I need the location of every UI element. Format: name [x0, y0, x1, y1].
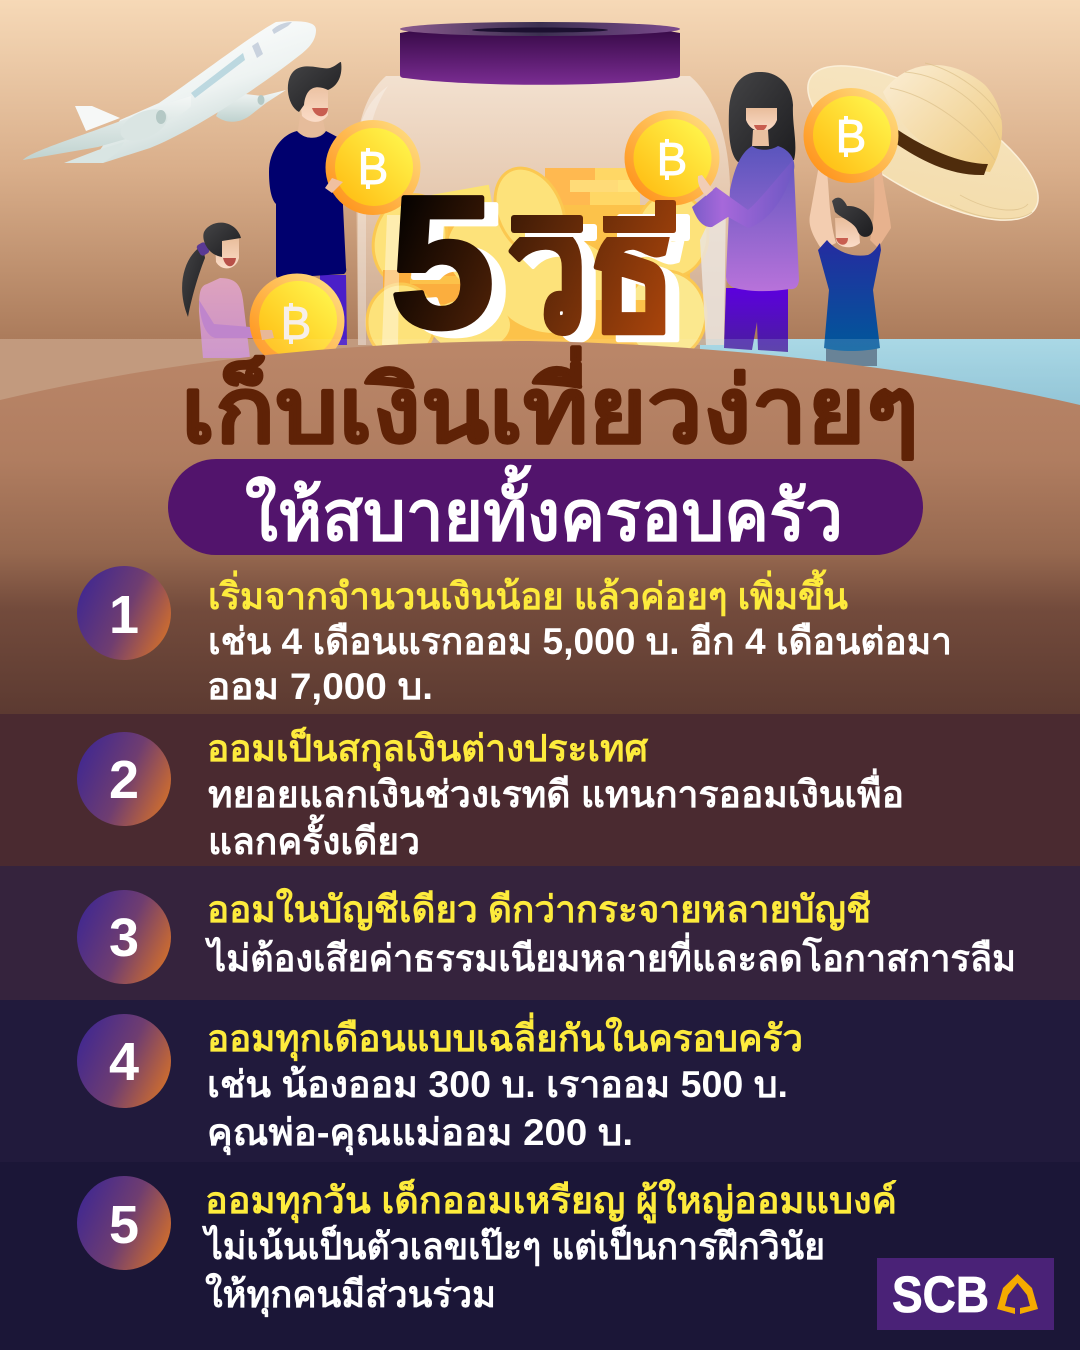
subtitle pill: ให้สบายทั้งครอบครัว	[245, 464, 843, 555]
tip 5 body: ให้ทุกคนมีส่วนร่วม	[205, 1272, 496, 1318]
tip 2 body: แลกครั้งเดียว	[208, 814, 420, 862]
headline: เก็บเงินเที่ยวง่ายๆ: เก็บเงินเที่ยวง่ายๆ	[181, 345, 919, 462]
jar lid	[400, 22, 680, 85]
number badge 4	[77, 1014, 171, 1108]
number badge 2: 2	[109, 750, 139, 810]
coin: B	[657, 133, 687, 185]
tip 4 body: คุณพ่อ-คุณแม่ออม 200 บ.	[207, 1112, 633, 1156]
number badge 5	[77, 1176, 171, 1270]
dark gradient 5 วิธี	[393, 195, 676, 336]
tip 4 heading: ออมทุกเดือนแบบเฉลี่ยกันในครอบครัว	[207, 1012, 803, 1062]
subtitle pill	[168, 459, 923, 555]
number badge 3: 3	[109, 908, 139, 968]
number badge 1: 1	[109, 585, 139, 645]
headline: 5 วิธี	[393, 195, 690, 342]
number badge 1	[77, 566, 171, 660]
tip 4	[77, 1012, 803, 1156]
dark gradient 5 วิธี: 5	[390, 157, 495, 367]
white offset of 5 วิธี: 5	[404, 164, 509, 374]
SCB logo	[877, 1258, 1054, 1330]
illustration: airplane	[23, 21, 316, 163]
tip 3 heading: ออมในบัญชีเดียว ดีกว่ากระจายหลายบัญชี	[207, 887, 871, 931]
coin	[804, 88, 898, 183]
jar coins	[363, 157, 708, 360]
coin: B	[358, 142, 388, 194]
row backgrounds	[0, 714, 1080, 1350]
sky background	[0, 0, 1080, 340]
number badge 4: 4	[109, 1032, 139, 1092]
tip 1 body: ออม 7,000 บ.	[207, 666, 433, 707]
tip 4 body: เช่น น้องออม 300 บ. เราออม 500 บ.	[207, 1064, 788, 1105]
tip 1 body	[207, 621, 952, 707]
illustration: mother with coin	[624, 72, 799, 352]
tip 2	[77, 725, 904, 862]
illustration: straw hat	[786, 36, 1060, 250]
tip 3 body: ไม่ต้องเสียค่าธรรมเนียมหลายที่และลดโอกาสการลืม	[204, 932, 1016, 979]
sand hill	[0, 341, 1080, 714]
sea strip	[0, 339, 1080, 429]
white offset of 5 วิธี	[411, 202, 690, 342]
tip 5	[77, 1176, 897, 1318]
tip 4 body	[207, 1064, 788, 1156]
illustration: coin jar	[356, 22, 730, 360]
tip 5 body	[201, 1223, 825, 1318]
tip 5 heading: ออมทุกวัน เด็กออมเหรียญ ผู้ใหญ่ออมแบงค์	[205, 1177, 897, 1224]
number badge 3	[77, 890, 171, 984]
coin: B	[281, 297, 311, 349]
illustration: father with coin	[269, 62, 420, 345]
white offset of 5 วิธี: วิธี	[519, 180, 691, 375]
number badge 2	[77, 732, 171, 826]
tip 2 heading: ออมเป็นสกุลเงินต่างประเทศ	[207, 725, 649, 772]
tip 2 body: ทยอยแลกเงินช่วงเรทดี แทนการออมเงินเพื่อ	[208, 768, 904, 815]
illustration: boy with coin	[804, 88, 898, 366]
jar body	[356, 76, 730, 345]
icon: SCB bodhi leaf	[997, 1274, 1038, 1314]
coin	[624, 110, 720, 206]
tip 2 body	[208, 768, 904, 862]
dark gradient 5 วิธี: วิธี	[505, 173, 677, 368]
coin: B	[836, 110, 866, 162]
tip 5 body: ไม่เน้นเป็นตัวเลขเป๊ะๆ แต่เป็นการฝึกวินัย	[201, 1223, 825, 1267]
tip 3	[77, 887, 1016, 984]
coin	[326, 120, 420, 215]
SCB logo: SCB	[892, 1266, 989, 1323]
coin	[250, 274, 344, 368]
illustration: girl with coin	[182, 223, 344, 368]
number badge 5: 5	[109, 1195, 139, 1255]
tip 1 body: เช่น 4 เดือนแรกออม 5,000 บ. อีก 4 เดือนต่อมา	[208, 621, 952, 662]
tip 1 heading: เริ่มจากจำนวนเงินน้อย แล้วค่อยๆ เพิ่มขึ้น	[208, 569, 848, 617]
shore tint over legs	[0, 339, 1080, 409]
jar highlights	[382, 215, 400, 345]
tip 1	[77, 566, 952, 707]
